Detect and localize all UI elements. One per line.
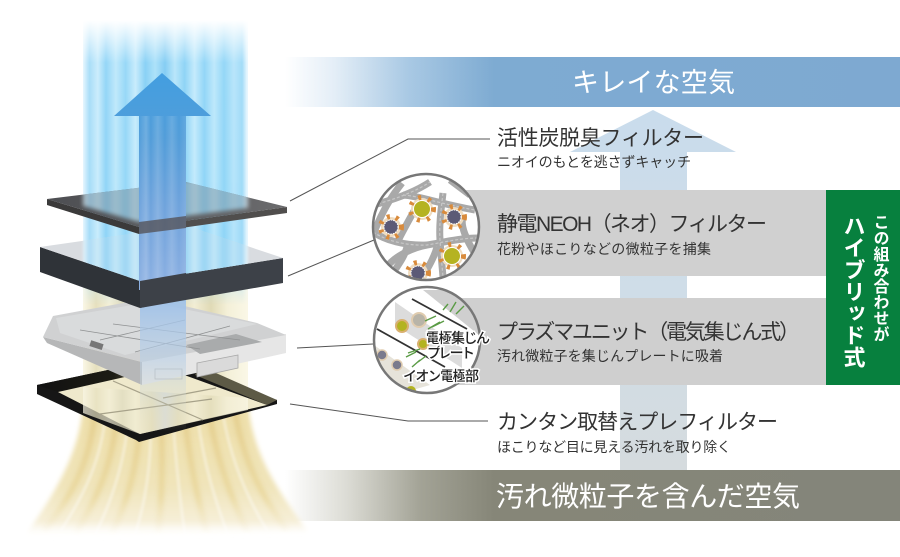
circle labels: イオン電極部 (403, 368, 479, 384)
particle: dark (408, 262, 428, 284)
panel: hybrid label: この組み合わせが (870, 214, 890, 342)
circle labels: 電極集じん (426, 330, 490, 346)
text: pre-filter: カンタン取替えプレフィルター (497, 411, 778, 434)
band: clean air (285, 57, 900, 107)
particle: yellow (410, 198, 434, 220)
circle labels: プレート (427, 345, 475, 361)
filter: plasma unit (third layer) (43, 298, 286, 385)
band: electrostatic filter row (430, 190, 827, 276)
particle: dark (444, 206, 464, 228)
text: activated carbon filter: ニオイのもとを逃さずキャッチ (497, 154, 691, 170)
leader lines (288, 139, 490, 421)
central blue arrow (114, 73, 211, 308)
panel: hybrid label: ハイブリッド式 (840, 215, 866, 368)
circle: plasma electrodes (370, 287, 485, 396)
lower arrow streak through the stack (140, 300, 186, 432)
panel: hybrid label (826, 190, 900, 385)
filter: easy-replace pre-filter (bottom layer) (37, 358, 277, 442)
band: clean air: キレイな空気 (572, 68, 735, 98)
text: activated carbon filter (497, 127, 704, 170)
text: pre-filter (497, 411, 778, 455)
airflow: blue clean air columns (83, 20, 248, 305)
text: plasma unit (497, 321, 800, 364)
particle: dark (380, 216, 402, 238)
filter: activated carbon deodorizing (top layer) (47, 180, 287, 234)
text: NEOH filter (497, 213, 767, 257)
text: NEOH filter: 花粉やほこりなどの微粒子を捕集 (497, 241, 711, 257)
circle labels (403, 330, 490, 384)
band: plasma unit row (430, 298, 827, 385)
large pale upward arrow (570, 110, 736, 471)
band: dirty air: 汚れ微粒子を含んだ空気 (496, 481, 800, 512)
circle: electrostatic fibers and trapped particles (373, 174, 479, 284)
band: dirty air (285, 470, 900, 521)
text: NEOH filter: 静電NEOH（ネオ）フィルター (497, 213, 767, 236)
airflow: yellow dirty air fan (24, 285, 308, 537)
text: plasma unit: プラズマユニット（電気集じん式） (497, 321, 800, 344)
particle: yellow (440, 244, 464, 268)
filter: electrostatic NEOH (second layer) (40, 222, 283, 308)
text: activated carbon filter: 活性炭脱臭フィルター (497, 127, 704, 150)
text: pre-filter: ほこりなど目に見える汚れを取り除く (497, 439, 731, 455)
text: plasma unit: 汚れ微粒子を集じんプレートに吸着 (497, 348, 723, 364)
